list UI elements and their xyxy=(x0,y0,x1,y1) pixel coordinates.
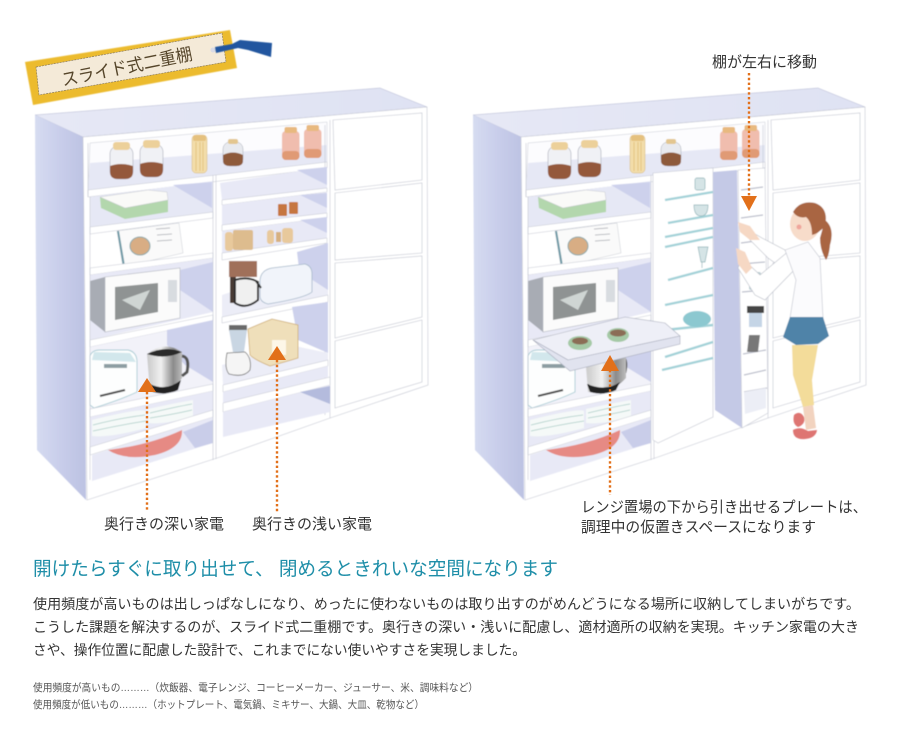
body text: 使用頻度が高いものは出しっぱなしになり、めったに使わないものは取り出すのがめんどうになる場所に収納してしまいがちです。 xyxy=(33,596,860,612)
left arm xyxy=(745,228,795,270)
footnote: usage frequency: 使用頻度が高いもの………（炊飯器、電子レンジ、コーヒーメーカー、ジューサー、米、調味料など） xyxy=(33,681,478,694)
label: shallow appliance: 奥行きの浅い家電 xyxy=(252,516,372,533)
rice cooker xyxy=(248,319,298,366)
narrow shelf unit xyxy=(738,168,768,428)
pull-out plate xyxy=(533,317,680,371)
toaster xyxy=(256,264,312,304)
woman reaching for shelf xyxy=(736,202,832,439)
label: deep appliance: 奥行きの深い家電 xyxy=(104,516,224,533)
bowls on plate xyxy=(568,328,629,350)
illustration: right cabinet, opened xyxy=(473,88,866,500)
body text: さや、操作位置に配慮した設計で、これまでにない使いやすさを実現しました。 xyxy=(33,642,526,658)
label: shelf moves: 棚が左右に移動 xyxy=(712,54,817,71)
sauce jars xyxy=(278,202,298,216)
middle sliding shelf column xyxy=(220,167,330,437)
head xyxy=(790,207,820,241)
body text: こうした課題を解決するのが、スライド式二重棚です。奥行きの深い・浅いに配慮し、適材適所の収納を実現。キッチン家電の大き xyxy=(33,619,859,635)
arrow: pull-out plate xyxy=(601,355,619,495)
label: pull-out plate xyxy=(581,499,867,536)
footnote: usage frequency xyxy=(33,681,478,711)
illustration: left cabinet, closed xyxy=(35,88,428,500)
arrow: shallow appliance xyxy=(268,346,286,512)
shirt xyxy=(785,242,823,318)
title tag: スライド式二重棚 xyxy=(25,30,272,105)
hands xyxy=(736,222,760,274)
footnote: usage frequency: 使用頻度が低いもの………（ホットプレート、電気鍋、ミキサー、大鍋、大皿、乾物など） xyxy=(33,698,424,711)
right arm xyxy=(738,250,802,300)
wooden containers xyxy=(225,228,293,251)
body text xyxy=(33,596,860,658)
slippers xyxy=(793,413,817,439)
arrow: shelf moves left and right xyxy=(741,73,757,211)
tag board xyxy=(25,30,237,105)
label: pull-out plate: レンジ置場の下から引き出せるプレートは、 xyxy=(581,499,867,516)
heading: 開けたらすぐに取り出せて、 閉めるときれいな空間になります xyxy=(33,558,558,580)
hair and ponytail xyxy=(793,202,832,260)
skirt xyxy=(783,317,829,345)
tag ribbon xyxy=(215,40,272,57)
legs xyxy=(792,345,818,407)
cups xyxy=(694,178,708,268)
tag text: スライド式二重棚 xyxy=(60,44,194,90)
purple panel side xyxy=(713,170,742,428)
blue bowl xyxy=(683,311,711,327)
white sliding panel with glass shelves xyxy=(653,168,713,443)
coffee maker xyxy=(229,261,258,306)
label: pull-out plate: 調理中の仮置きスペースになります xyxy=(581,519,816,536)
arrow: deep appliance xyxy=(138,378,156,511)
blender xyxy=(226,325,250,375)
kettle under plate xyxy=(586,352,626,394)
